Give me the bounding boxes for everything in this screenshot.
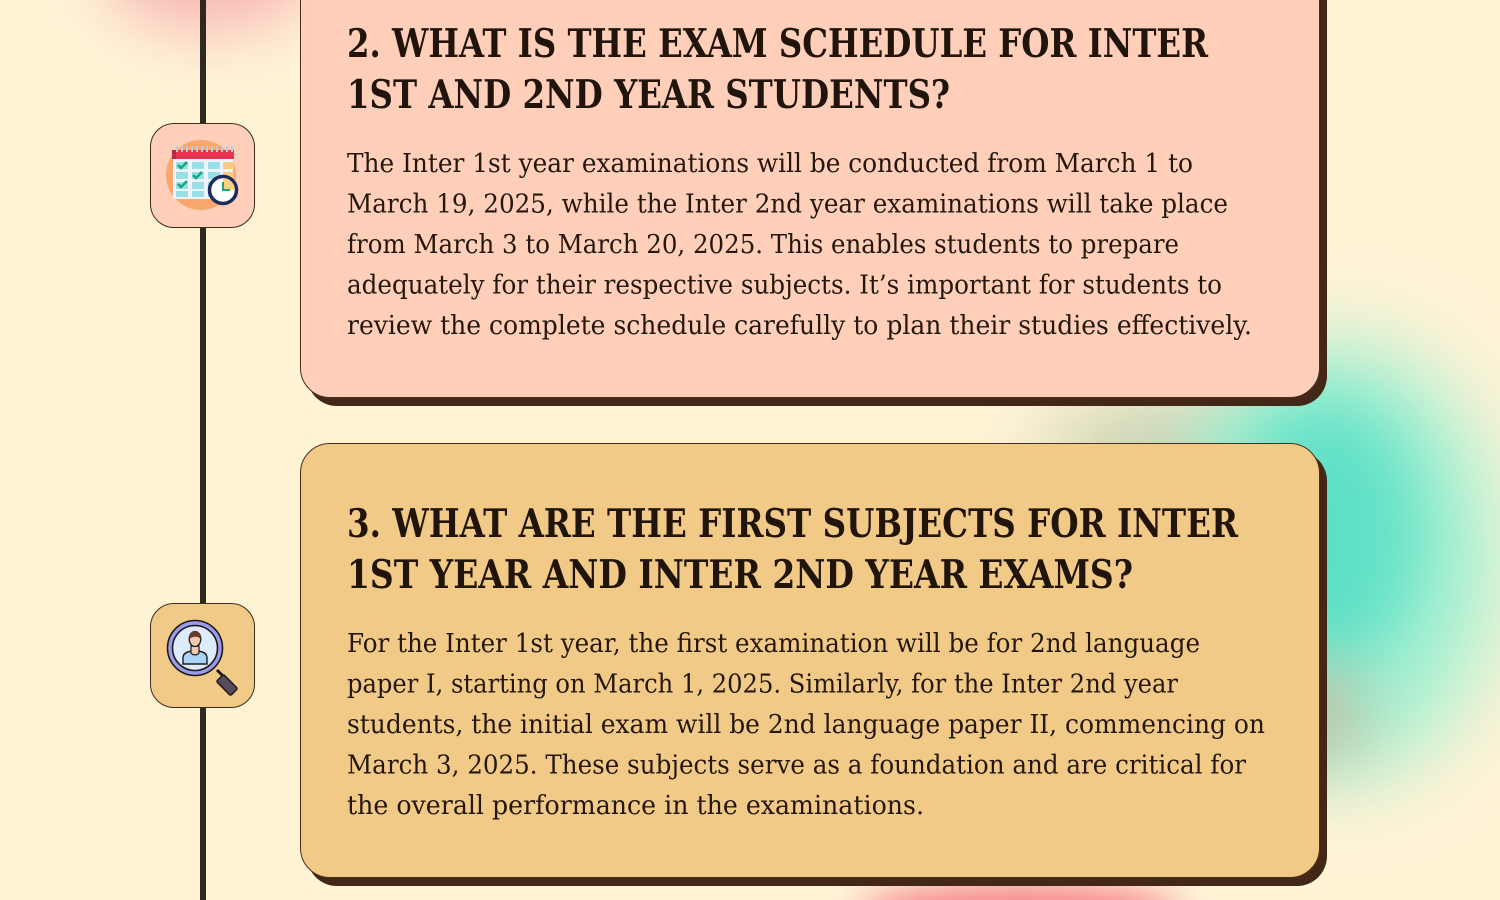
icon: calendar with clock xyxy=(150,123,255,228)
text block: question 2 answer xyxy=(347,149,1252,341)
text block: question 3 answer xyxy=(347,629,1265,821)
text block: question 2 answer: review the complete schedule carefully to plan their studies effectively. xyxy=(347,311,1252,341)
heading: question 3 xyxy=(347,501,1238,598)
text block: question 3 answer: paper I, starting on March 1, 2025. Similarly, for the Inter 2nd year xyxy=(347,670,1179,700)
heading: question 3: 3. WHAT ARE THE FIRST SUBJECTS FOR INTER xyxy=(347,501,1238,547)
text block: question 3 answer: For the Inter 1st year, the first examination will be for 2nd language xyxy=(347,629,1200,659)
background blob: pink top left xyxy=(100,0,320,30)
heading: question 2: 2. WHAT IS THE EXAM SCHEDULE FOR INTER xyxy=(347,21,1208,67)
panel: question 2 card xyxy=(300,0,1320,398)
heading: question 2 xyxy=(347,21,1208,118)
background blob: grey-rose haze left of teal xyxy=(1040,400,1340,520)
panel: question 3 card xyxy=(300,443,1320,878)
icon: magnifier with person xyxy=(150,603,255,708)
heading: question 2: 1ST AND 2ND YEAR STUDENTS? xyxy=(347,72,950,118)
text block: question 2 answer: The Inter 1st year examinations will be conducted from March 1 to xyxy=(347,149,1193,179)
text block: question 2 answer: March 19, 2025, while the Inter 2nd year examinations will take place xyxy=(347,190,1228,220)
timeline line xyxy=(200,0,206,900)
text block: question 3 answer: March 3, 2025. These subjects serve as a foundation and are critical for xyxy=(347,750,1247,780)
background blob: light mint halo xyxy=(1170,340,1500,780)
text block: question 3 answer: the overall performance in the examinations. xyxy=(347,791,924,821)
text block: question 3 answer: students, the initial exam will be 2nd language paper II, commencing on xyxy=(347,710,1265,740)
background blob: teal right xyxy=(1230,400,1420,670)
background blob: pink bottom xyxy=(860,885,1180,900)
background blob: grey shade below teal xyxy=(1240,660,1370,770)
text block: question 2 answer: from March 3 to March 20, 2025. This enables students to prepare xyxy=(347,230,1179,260)
heading: question 3: 1ST YEAR AND INTER 2ND YEAR EXAMS? xyxy=(347,552,1133,598)
text block: question 2 answer: adequately for their respective subjects. It’s important for students to xyxy=(347,270,1222,300)
